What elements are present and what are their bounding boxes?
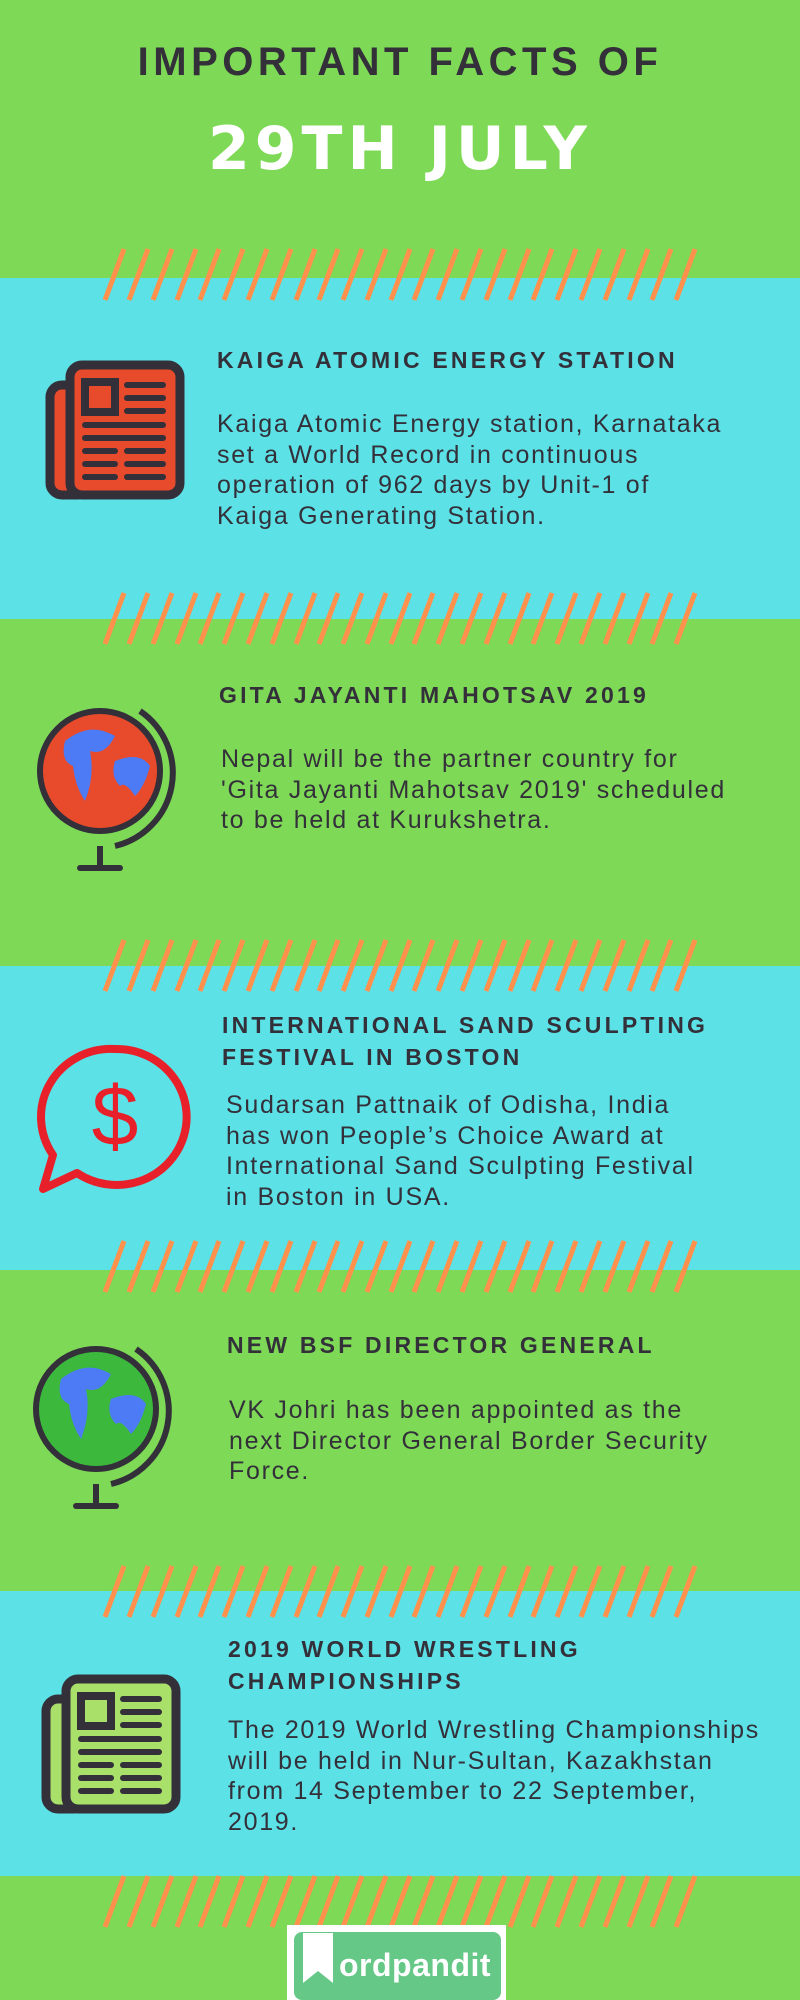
text 4 <box>229 1396 709 1485</box>
text 5: The 2019 World Wrestling Championships <box>228 1716 760 1744</box>
heading 3: FESTIVAL IN BOSTON <box>222 1044 522 1070</box>
text 2: to be held at Kurukshetra. <box>221 806 552 834</box>
text 1 <box>217 410 722 530</box>
text 1: set a World Record in continuous <box>217 441 639 469</box>
text 1: Kaiga Atomic Energy station, Karnataka <box>217 410 722 438</box>
text 5 <box>228 1716 760 1836</box>
text 4: Force. <box>229 1457 310 1485</box>
icon: newspaper green <box>42 1674 180 1814</box>
text 2: 'Gita Jayanti Mahotsav 2019' scheduled <box>221 776 726 804</box>
text 5: from 14 September to 22 September, <box>228 1777 697 1805</box>
icon: globe green <box>33 1346 172 1509</box>
icon: dollar speech bubble <box>37 1044 191 1193</box>
text 3: in Boston in USA. <box>226 1183 451 1211</box>
heading 3: INTERNATIONAL SAND SCULPTING <box>222 1012 708 1038</box>
text 5: will be held in Nur-Sultan, Kazakhstan <box>228 1747 714 1775</box>
text 3: International Sand Sculpting Festival <box>226 1152 695 1180</box>
heading 5 <box>228 1636 581 1694</box>
logo: wordpandit: ordpandit <box>339 1947 491 1983</box>
text 2 <box>221 745 726 834</box>
heading 2: GITA JAYANTI MAHOTSAV 2019 <box>219 682 649 708</box>
text 1: operation of 962 days by Unit-1 of <box>217 471 650 499</box>
text 4: VK Johri has been appointed as the <box>229 1396 683 1424</box>
heading 5: CHAMPIONSHIPS <box>228 1668 464 1694</box>
logo: wordpandit <box>287 1925 506 2000</box>
subtitle date: 29TH JULY <box>208 114 592 184</box>
heading 4: NEW BSF DIRECTOR GENERAL <box>227 1332 655 1358</box>
icon: globe red <box>37 708 176 871</box>
icon: newspaper red <box>46 360 184 500</box>
text 3 <box>226 1091 695 1211</box>
heading 5: 2019 WORLD WRESTLING <box>228 1636 581 1662</box>
text 4: next Director General Border Security <box>229 1427 709 1455</box>
text 2: Nepal will be the partner country for <box>221 745 679 773</box>
title: IMPORTANT FACTS OF <box>138 40 662 84</box>
text 5: 2019. <box>228 1808 299 1836</box>
text 3: Sudarsan Pattnaik of Odisha, India <box>226 1091 670 1119</box>
heading 1: KAIGA ATOMIC ENERGY STATION <box>217 347 678 373</box>
text 3: has won People’s Choice Award at <box>226 1122 664 1150</box>
icon: dollar speech bubble: $ <box>92 1069 138 1163</box>
heading 3 <box>222 1012 708 1070</box>
text 1: Kaiga Generating Station. <box>217 502 546 530</box>
